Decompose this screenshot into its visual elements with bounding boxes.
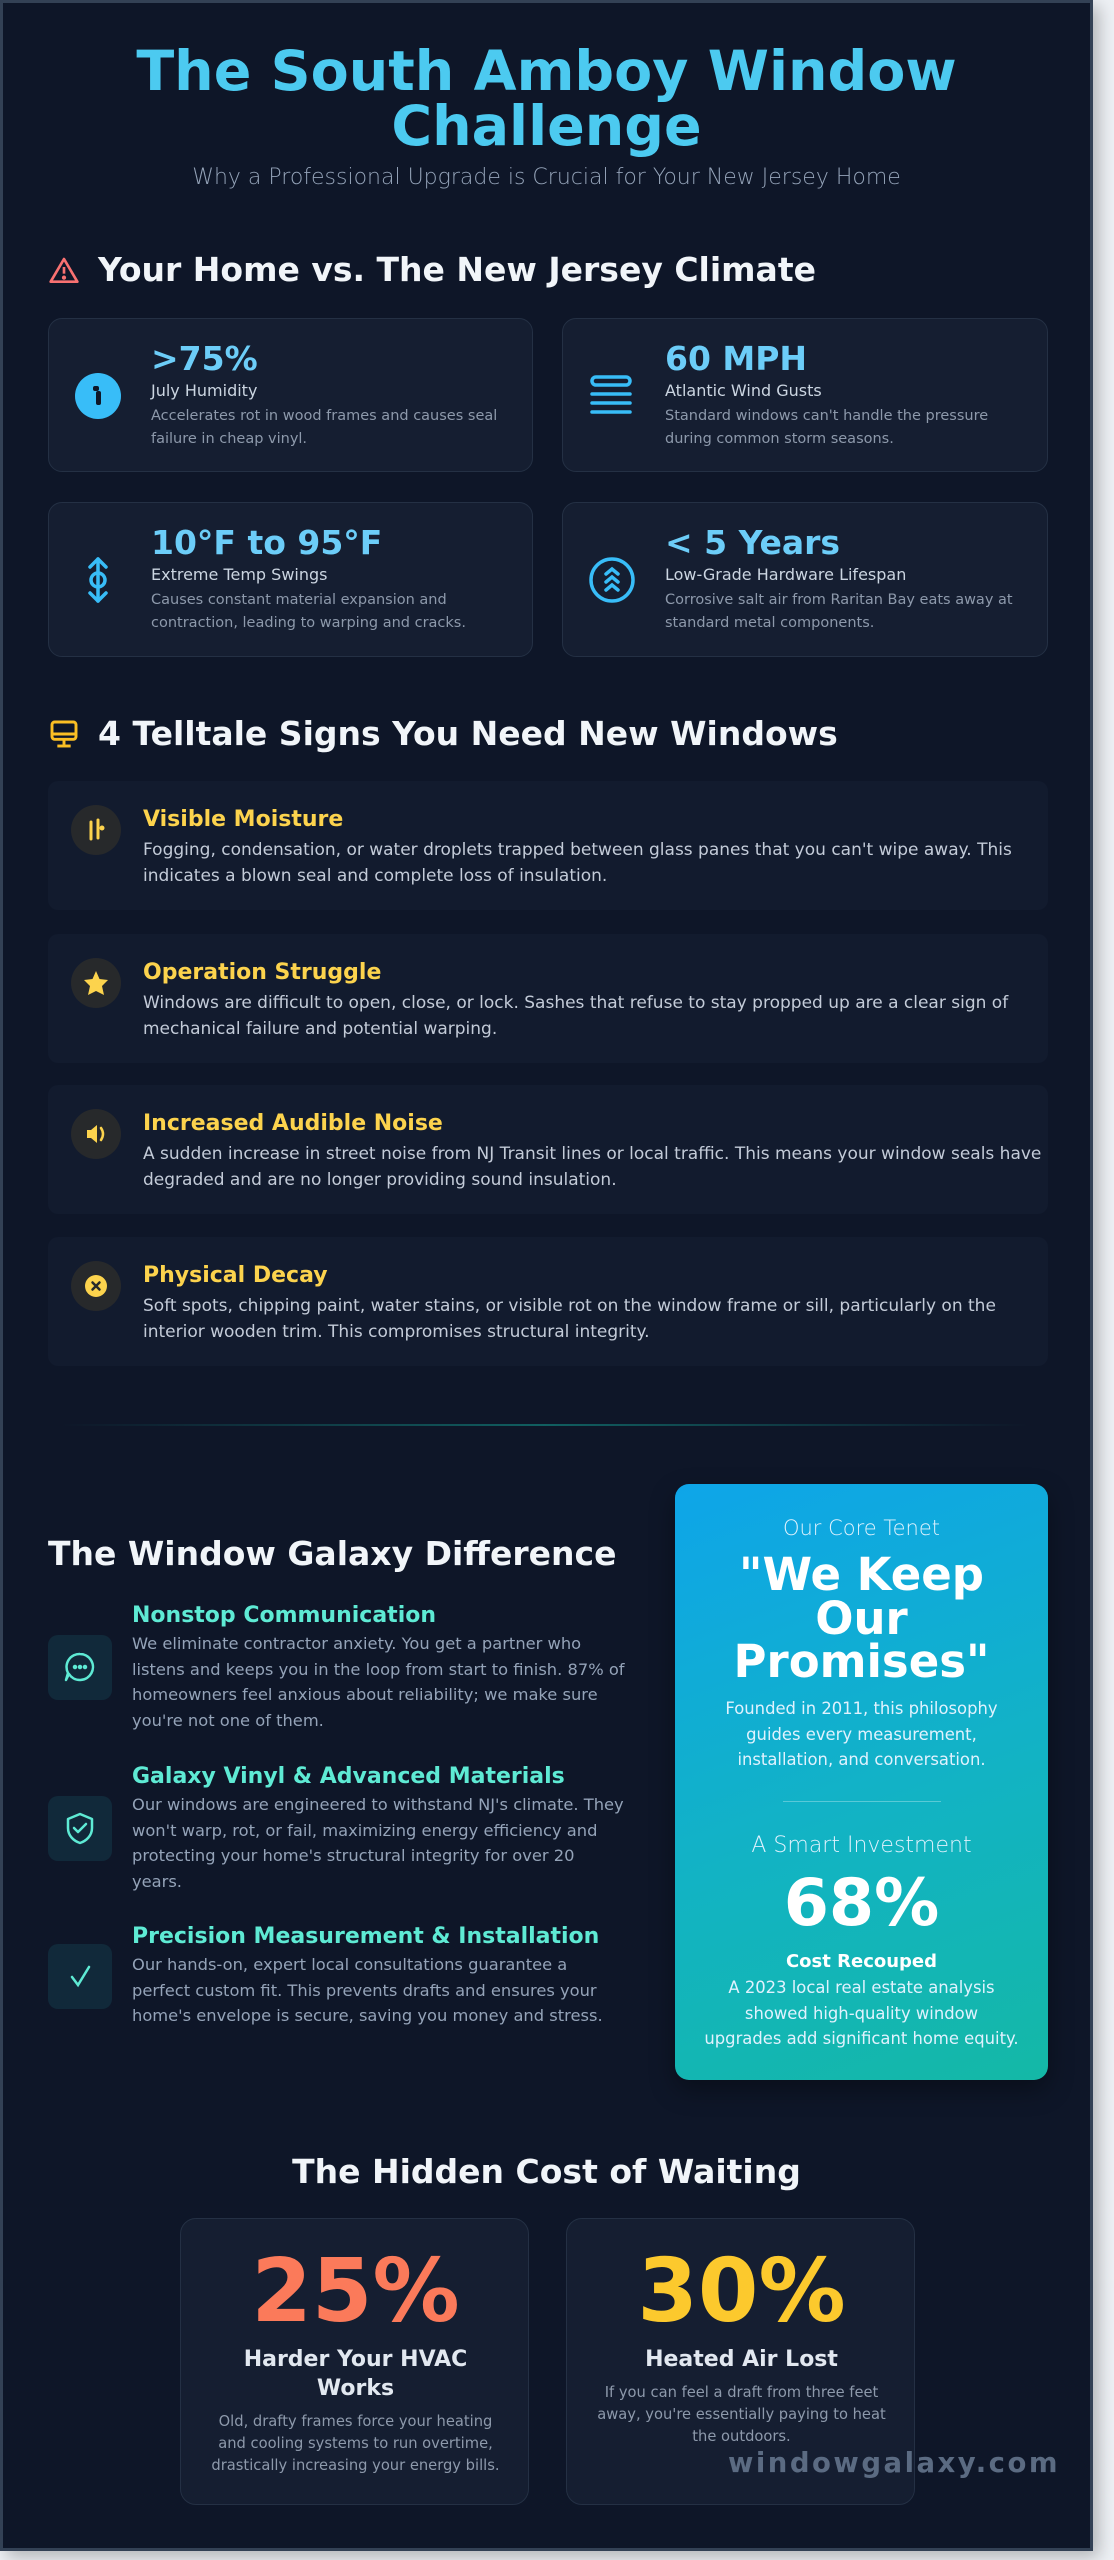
feature: communication (48, 1603, 625, 1730)
feature: communication: homeowners feel anxious about reliability; we make sure (132, 1685, 598, 1704)
card: hvac: 25% (251, 2240, 460, 2342)
feature: communication: you're not one of them. (132, 1711, 324, 1730)
sign: moisture: Fogging, condensation, or water droplets trapped between glass panes that you can't wipe away. This (143, 840, 1012, 860)
feature: communication: Nonstop Communication (132, 1603, 436, 1628)
card: humidity: Accelerates rot in wood frames and causes seal (151, 408, 497, 424)
quote: Promises" (734, 1635, 989, 1688)
card: temp: contraction, leading to warping and cracks. (151, 615, 466, 631)
feature: materials (48, 1764, 624, 1891)
sign: noise (48, 1085, 1048, 1214)
card: hardware: < 5 Years (665, 523, 840, 562)
heading: signs: 4 Telltale Signs You Need New Windows (98, 714, 838, 753)
icon: info (75, 373, 121, 419)
card: heated air: the outdoors. (692, 2428, 791, 2445)
footer: windowgalaxy.com (728, 2447, 1060, 2479)
title: Challenge (391, 94, 702, 159)
card: temp: Causes constant material expansion and (151, 592, 447, 608)
feature: materials: protecting your home's structural integrity for over 20 (132, 1846, 574, 1865)
panel: core tenet: Our Core Tenet (783, 1516, 940, 1540)
sign: decay: Soft spots, chipping paint, water stains, or visible rot on the window frame or sill, particularly on the (143, 1296, 996, 1316)
sign: moisture (48, 781, 1048, 910)
icon: warning (49, 258, 79, 283)
card: hardware: Corrosive salt air from Raritan Bay eats away at (665, 592, 1013, 608)
panel: core tenet: Founded in 2011, this philosophy (725, 1699, 998, 1718)
card: temp: Extreme Temp Swings (151, 565, 327, 584)
title (136, 39, 957, 159)
icon: shield (48, 1796, 112, 1861)
card: hardware: standard metal components. (665, 615, 874, 631)
feature: precision: Precision Measurement & Installation (132, 1924, 599, 1949)
card: wind: Atlantic Wind Gusts (665, 381, 822, 400)
feature: communication: listens and keeps you in the loop from start to finish. 87% of (132, 1660, 625, 1679)
card: humidity: failure in cheap vinyl. (151, 431, 307, 447)
feature: materials: Galaxy Vinyl & Advanced Materials (132, 1764, 565, 1789)
sign: operation (48, 934, 1048, 1063)
panel: core tenet (675, 1484, 1048, 2080)
feature: precision: home's envelope is secure, saving you money and stress. (132, 2006, 603, 2025)
card: heated air: If you can feel a draft from three feet (605, 2384, 878, 2401)
quote: "We Keep (739, 1548, 984, 1601)
feature: materials: won't warp, rot, or fail, maximizing energy efficiency and (132, 1821, 597, 1840)
sign: decay: interior wooden trim. This compromises structural integrity. (143, 1322, 650, 1342)
card: temp: 10°F to 95°F (151, 523, 382, 562)
stat: 68%: 68% (784, 1866, 939, 1941)
card: heated air: away, you're essentially paying to heat (597, 2406, 886, 2423)
sign: noise: Increased Audible Noise (143, 1111, 443, 1136)
card: hvac (180, 2218, 529, 2505)
subtitle: Why a Professional Upgrade is Crucial for Your New Jersey Home (192, 165, 901, 190)
card: humidity: July Humidity (151, 381, 257, 400)
icon: wind lines (590, 375, 632, 414)
card: humidity (48, 318, 533, 472)
feature: communication: We eliminate contractor anxiety. You get a partner who (132, 1634, 581, 1653)
feature: materials: Our windows are engineered to withstand NJ's climate. They (132, 1795, 624, 1814)
card: hvac: Old, drafty frames force your heating (219, 2413, 492, 2430)
icon: star (71, 958, 121, 1008)
quote: Our (815, 1592, 908, 1644)
card: wind: Standard windows can't handle the pressure (665, 408, 988, 424)
card: heated air (566, 2218, 915, 2505)
icon: droplets (71, 805, 121, 855)
card: humidity: >75% (151, 339, 258, 378)
card: hvac: drastically increasing your energy bills. (211, 2457, 500, 2474)
sign: noise: A sudden increase in street noise from NJ Transit lines or local traffic. This means your window seals have (143, 1144, 1041, 1164)
card: hvac: Harder Your HVAC (244, 2347, 467, 2372)
sign: operation: Windows are difficult to open, close, or lock. Sashes that refuse to stay propped up are a clear sign of (143, 993, 1008, 1013)
heading: hidden cost: The Hidden Cost of Waiting (292, 2152, 801, 2191)
icon: speaker (71, 1109, 121, 1159)
feature: materials: years. (132, 1872, 182, 1891)
card: hvac: Works (317, 2376, 394, 2401)
panel: core tenet: installation, and conversation. (737, 1750, 986, 1769)
sign: moisture: Visible Moisture (143, 807, 343, 832)
panel: core tenet: upgrades add significant home equity. (704, 2029, 1019, 2048)
sign: moisture: indicates a blown seal and complete loss of insulation. (143, 866, 607, 886)
icon: check (48, 1944, 112, 2009)
panel: core tenet: A Smart Investment (751, 1833, 972, 1858)
panel: core tenet: Cost Recouped (786, 1951, 937, 1972)
card: heated air: 30% (637, 2240, 846, 2342)
panel: core tenet: showed high-quality window (745, 2004, 978, 2022)
feature: precision (48, 1924, 603, 2025)
card: heated air: Heated Air Lost (645, 2347, 838, 2372)
card: hvac: and cooling systems to run overtime, (218, 2435, 493, 2452)
card: hardware (562, 502, 1048, 657)
feature: precision: perfect custom fit. This prevents drafts and ensures your (132, 1981, 597, 2000)
sign: decay: Physical Decay (143, 1263, 328, 1288)
feature: precision: Our hands-on, expert local consultations guarantee a (132, 1955, 567, 1974)
sign: operation: Operation Struggle (143, 960, 381, 985)
sign: operation: mechanical failure and potential warping. (143, 1019, 497, 1039)
icon: salt circle (589, 557, 635, 603)
icon: monitor (50, 720, 78, 748)
icon: chat (48, 1635, 112, 1700)
heading: climate: Your Home vs. The New Jersey Climate (98, 250, 816, 289)
sign: noise: degraded and are no longer providing sound insulation. (143, 1170, 617, 1190)
card: wind: 60 MPH (665, 339, 807, 378)
card: wind: during common storm seasons. (665, 431, 894, 447)
card: hardware: Low-Grade Hardware Lifespan (665, 565, 906, 584)
icon: temp arrows (88, 557, 108, 603)
sign: decay (48, 1237, 1048, 1366)
panel: core tenet: guides every measurement, (746, 1724, 977, 1744)
card: wind (562, 318, 1048, 472)
card: temp (48, 502, 533, 657)
title: The South Amboy Window (136, 39, 957, 104)
quote (734, 1548, 989, 1688)
icon: x circle (71, 1261, 121, 1311)
heading: difference: The Window Galaxy Difference (48, 1534, 616, 1573)
panel: core tenet: A 2023 local real estate analysis (728, 1978, 995, 1997)
